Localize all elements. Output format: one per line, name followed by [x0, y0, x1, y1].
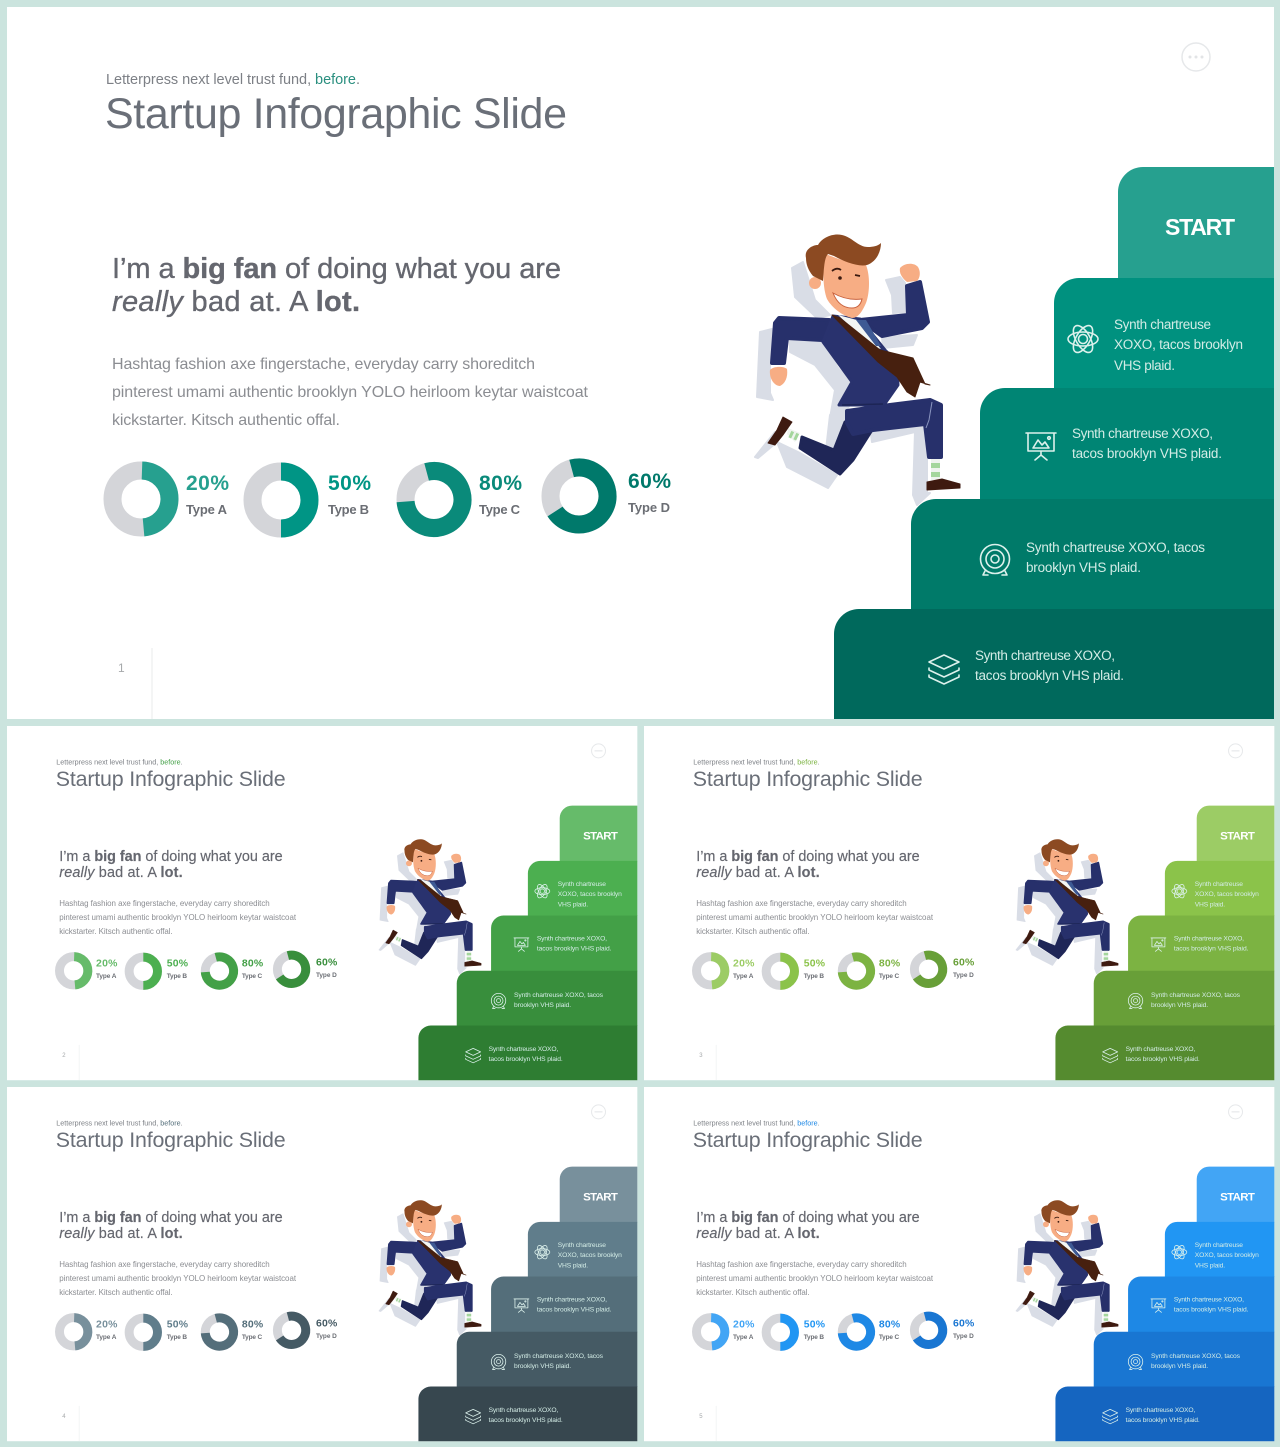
- heading: [112, 253, 561, 318]
- step 2: VHS plaid.: [558, 902, 588, 909]
- heading: I’m a big fan of doing what you are: [696, 1210, 920, 1226]
- kicker: Letterpress next level trust fund, before.: [693, 1118, 820, 1127]
- step 4: Synth chartreuse XOXO, tacos: [514, 992, 604, 999]
- step 3: tacos brooklyn VHS plaid.: [1072, 446, 1222, 461]
- step 3: [1128, 1277, 1274, 1332]
- donut: Type B: [766, 957, 825, 985]
- donut: Type C: 80%: [479, 472, 522, 495]
- body text: Hashtag fashion axe fingerstache, everyday carry shoreditch: [696, 899, 907, 908]
- donut: Type A: 20%: [733, 1319, 754, 1330]
- illustration: running businessman: [379, 839, 481, 974]
- heading: I’m a big fan of doing what you are: [59, 849, 283, 865]
- donut: Type A: Type A: [96, 1334, 117, 1341]
- donut: Type B: 50%: [328, 472, 371, 495]
- heading: [59, 1210, 283, 1242]
- step: start: [560, 806, 637, 861]
- step: start: START: [1220, 830, 1255, 842]
- body text: kickstarter. Kitsch authentic offal.: [696, 1288, 810, 1297]
- step 3: Synth chartreuse XOXO,: [537, 1296, 607, 1303]
- heading: really bad at. A lot.: [112, 286, 360, 318]
- step: start: START: [583, 1191, 618, 1203]
- kicker: Letterpress next level trust fund, before.: [106, 72, 360, 88]
- donut: Type C: Type C: [479, 502, 521, 517]
- donut: Type C: 80%: [242, 1319, 263, 1330]
- donut: Type B: [129, 957, 188, 985]
- heading: really bad at. A lot.: [696, 1226, 820, 1242]
- step 2: XOXO, tacos brooklyn: [558, 891, 622, 898]
- donut: Type B: Type B: [167, 973, 187, 980]
- step 5: Synth chartreuse XOXO,: [975, 648, 1115, 663]
- body text: kickstarter. Kitsch authentic offal.: [59, 1288, 173, 1297]
- donut: Type D: [274, 1313, 337, 1348]
- body text: [112, 356, 589, 429]
- donut: Type A: 20%: [186, 472, 229, 495]
- donut: Type D: 60%: [316, 1318, 337, 1329]
- step 2: XOXO, tacos brooklyn: [1195, 1252, 1259, 1259]
- donut: Type B: 50%: [167, 958, 188, 969]
- step 4: brooklyn VHS plaid.: [514, 1363, 571, 1370]
- donut: Type D: 60%: [628, 470, 671, 493]
- step 3: tacos brooklyn VHS plaid.: [1174, 945, 1249, 952]
- step 2: XOXO, tacos brooklyn: [1195, 891, 1259, 898]
- page number: [62, 1406, 79, 1441]
- body text: [696, 1260, 934, 1297]
- heading: really bad at. A lot.: [59, 865, 183, 881]
- panel: large teal slide: [7, 7, 1274, 719]
- title: Startup Infographic Slide: [693, 767, 923, 791]
- step 4: brooklyn VHS plaid.: [514, 1002, 571, 1009]
- step 5: [418, 1386, 637, 1441]
- donut: Type D: [911, 952, 974, 987]
- menu icon: [592, 744, 605, 758]
- donut: Type D: 60%: [316, 957, 337, 968]
- donut: Type D: Type D: [316, 972, 337, 979]
- menu icon: [1229, 1105, 1242, 1119]
- step: start: START: [1165, 214, 1235, 240]
- step: start: START: [583, 830, 618, 842]
- heading: really bad at. A lot.: [696, 865, 820, 881]
- step 5: Synth chartreuse XOXO,: [489, 1046, 558, 1053]
- step 5: [1055, 1025, 1274, 1080]
- donut: Type C: [202, 954, 263, 988]
- page number: 5: [699, 1414, 703, 1420]
- step 4: brooklyn VHS plaid.: [1026, 560, 1141, 575]
- step: start: [1118, 167, 1274, 279]
- donut: Type B: Type B: [804, 1334, 824, 1341]
- step 4: Synth chartreuse XOXO, tacos: [1151, 1353, 1241, 1360]
- body text: Hashtag fashion axe fingerstache, everyday carry shoreditch: [112, 356, 535, 373]
- donut: Type C: [202, 1315, 263, 1349]
- step 4: [1094, 1332, 1274, 1387]
- heading: [696, 1210, 920, 1242]
- donut: Type A: [696, 956, 754, 985]
- step 3: tacos brooklyn VHS plaid.: [1174, 1306, 1249, 1313]
- step 4: [1094, 971, 1274, 1026]
- step 2: VHS plaid.: [1195, 902, 1225, 909]
- donut: Type B: Type B: [804, 973, 824, 980]
- donut: Type A: Type A: [96, 973, 117, 980]
- step 3: [491, 916, 637, 971]
- donut: Type B: [252, 472, 371, 528]
- donut: Type C: [839, 954, 900, 988]
- body text: pinterest umami authentic brooklyn YOLO heirloom keytar waistcoat: [59, 913, 297, 922]
- step 4: [457, 971, 637, 1026]
- step 3: Synth chartreuse XOXO,: [1174, 1296, 1244, 1303]
- title: Startup Infographic Slide: [56, 1128, 286, 1152]
- donut: Type A: 20%: [733, 958, 754, 969]
- step 2: Synth chartreuse: [1195, 1242, 1243, 1249]
- page number: 2: [62, 1053, 66, 1059]
- donut: Type A: Type A: [733, 973, 754, 980]
- step 5: tacos brooklyn VHS plaid.: [975, 668, 1124, 683]
- panel: blue slide: [644, 1087, 1274, 1441]
- step 4: Synth chartreuse XOXO, tacos: [514, 1353, 604, 1360]
- heading: I’m a big fan of doing what you are: [696, 849, 920, 865]
- step 2: Synth chartreuse: [1195, 881, 1243, 888]
- donut: Type A: [112, 470, 229, 528]
- step: start: [560, 1167, 637, 1222]
- step 2: XOXO, tacos brooklyn: [1114, 337, 1243, 352]
- step 2: VHS plaid.: [1114, 358, 1175, 373]
- step 2: [1054, 278, 1274, 389]
- body text: pinterest umami authentic brooklyn YOLO heirloom keytar waistcoat: [696, 1274, 934, 1283]
- body text: kickstarter. Kitsch authentic offal.: [696, 927, 810, 936]
- donut: Type A: 20%: [96, 1319, 117, 1330]
- step: start: [1197, 1167, 1274, 1222]
- kicker: Letterpress next level trust fund, before.: [56, 757, 183, 766]
- step 4: Synth chartreuse XOXO, tacos: [1026, 540, 1205, 555]
- title: Startup Infographic Slide: [693, 1128, 923, 1152]
- step: start: [1197, 806, 1274, 861]
- illustration: running businessman: [1016, 1200, 1118, 1335]
- heading: [696, 849, 920, 881]
- step 3: tacos brooklyn VHS plaid.: [537, 1306, 612, 1313]
- donut: Type D: Type D: [316, 1333, 337, 1340]
- page number: 3: [699, 1053, 703, 1059]
- body text: kickstarter. Kitsch authentic offal.: [59, 927, 173, 936]
- step 5: tacos brooklyn VHS plaid.: [1126, 1417, 1200, 1424]
- body text: [696, 899, 934, 936]
- donut: Type D: [274, 952, 337, 987]
- step 2: VHS plaid.: [1195, 1263, 1225, 1270]
- step 5: Synth chartreuse XOXO,: [1126, 1046, 1195, 1053]
- menu icon: [1182, 43, 1210, 71]
- donut: Type B: [129, 1318, 188, 1346]
- heading: [59, 849, 283, 881]
- step 5: Synth chartreuse XOXO,: [489, 1407, 558, 1414]
- step 5: Synth chartreuse XOXO,: [1126, 1407, 1195, 1414]
- donut: Type B: Type B: [167, 1334, 187, 1341]
- step 3: [980, 388, 1274, 500]
- page number: 1: [118, 661, 125, 675]
- donut: Type A: Type A: [733, 1334, 754, 1341]
- body text: [59, 1260, 297, 1297]
- body text: pinterest umami authentic brooklyn YOLO heirloom keytar waistcoat: [59, 1274, 297, 1283]
- kicker: Letterpress next level trust fund, before.: [56, 1118, 183, 1127]
- step 2: [528, 861, 637, 916]
- heading: I’m a big fan of doing what you are: [112, 253, 561, 285]
- step 4: brooklyn VHS plaid.: [1151, 1002, 1208, 1009]
- step 5: tacos brooklyn VHS plaid.: [489, 1056, 563, 1063]
- donut: Type C: Type C: [879, 973, 900, 980]
- menu icon: [592, 1105, 605, 1119]
- step 4: brooklyn VHS plaid.: [1151, 1363, 1208, 1370]
- donut: Type D: Type D: [953, 1333, 974, 1340]
- illustration: running businessman: [379, 1200, 481, 1335]
- donut: Type A: [59, 1317, 117, 1346]
- donut: Type A: [696, 1317, 754, 1346]
- illustration: running businessman: [1016, 839, 1118, 974]
- step 3: Synth chartreuse XOXO,: [1174, 935, 1244, 942]
- step 3: [491, 1277, 637, 1332]
- page number: 4: [62, 1414, 66, 1420]
- step 2: VHS plaid.: [558, 1263, 588, 1270]
- body text: Hashtag fashion axe fingerstache, everyday carry shoreditch: [59, 1260, 270, 1269]
- panel: blue grey slide: [7, 1087, 637, 1441]
- step 5: [418, 1025, 637, 1080]
- step 5: [1055, 1386, 1274, 1441]
- donut: Type B: [766, 1318, 825, 1346]
- page number: [699, 1045, 716, 1080]
- donut: Type C: Type C: [242, 1334, 263, 1341]
- step 3: tacos brooklyn VHS plaid.: [537, 945, 612, 952]
- donut: Type D: Type D: [628, 500, 670, 515]
- donut: Type D: [911, 1313, 974, 1348]
- donut: Type C: 80%: [242, 958, 263, 969]
- donut: Type B: Type B: [328, 502, 369, 517]
- donut: Type D: 60%: [953, 1318, 974, 1329]
- step 3: Synth chartreuse XOXO,: [537, 935, 607, 942]
- step: start: START: [1220, 1191, 1255, 1203]
- page number: [699, 1406, 716, 1441]
- donut: Type C: Type C: [242, 973, 263, 980]
- page number: [118, 648, 152, 719]
- step 5: tacos brooklyn VHS plaid.: [1126, 1056, 1200, 1063]
- step 2: [1165, 861, 1274, 916]
- step 2: Synth chartreuse: [558, 1242, 606, 1249]
- step 5: [834, 609, 1274, 719]
- donut: Type C: [399, 465, 522, 534]
- donut: Type C: 80%: [879, 1319, 900, 1330]
- step 2: [528, 1222, 637, 1277]
- step 3: [1128, 916, 1274, 971]
- donut: Type A: Type A: [186, 502, 228, 517]
- donut: Type B: 50%: [804, 958, 825, 969]
- step 5: tacos brooklyn VHS plaid.: [489, 1417, 563, 1424]
- donut: Type A: 20%: [96, 958, 117, 969]
- donut: Type D: [544, 461, 671, 531]
- title: Startup Infographic Slide: [56, 767, 286, 791]
- page number: [62, 1045, 79, 1080]
- title: Startup Infographic Slide: [105, 90, 567, 138]
- panel: light green slide: [644, 726, 1274, 1080]
- donut: Type D: 60%: [953, 957, 974, 968]
- donut: Type D: Type D: [953, 972, 974, 979]
- illustration: running businessman: [755, 235, 960, 505]
- donut: Type C: Type C: [879, 1334, 900, 1341]
- step 2: [1165, 1222, 1274, 1277]
- body text: pinterest umami authentic brooklyn YOLO heirloom keytar waistcoat: [696, 913, 934, 922]
- step 2: Synth chartreuse: [558, 881, 606, 888]
- donut: Type B: 50%: [804, 1319, 825, 1330]
- step 4: Synth chartreuse XOXO, tacos: [1151, 992, 1241, 999]
- kicker: Letterpress next level trust fund, before.: [693, 757, 820, 766]
- donut: Type C: 80%: [879, 958, 900, 969]
- body text: Hashtag fashion axe fingerstache, everyday carry shoreditch: [59, 899, 270, 908]
- step 4: [457, 1332, 637, 1387]
- body text: Hashtag fashion axe fingerstache, everyday carry shoreditch: [696, 1260, 907, 1269]
- step 3: Synth chartreuse XOXO,: [1072, 426, 1213, 441]
- donut: Type C: [839, 1315, 900, 1349]
- step 4: [911, 499, 1274, 610]
- body text: pinterest umami authentic brooklyn YOLO heirloom keytar waistcoat: [112, 384, 589, 401]
- heading: really bad at. A lot.: [59, 1226, 183, 1242]
- donut: Type A: [59, 956, 117, 985]
- panel: green slide: [7, 726, 637, 1080]
- heading: I’m a big fan of doing what you are: [59, 1210, 283, 1226]
- body text: kickstarter. Kitsch authentic offal.: [112, 412, 340, 429]
- step 2: Synth chartreuse: [1114, 317, 1211, 332]
- menu icon: [1229, 744, 1242, 758]
- donut: Type B: 50%: [167, 1319, 188, 1330]
- step 2: XOXO, tacos brooklyn: [558, 1252, 622, 1259]
- body text: [59, 899, 297, 936]
